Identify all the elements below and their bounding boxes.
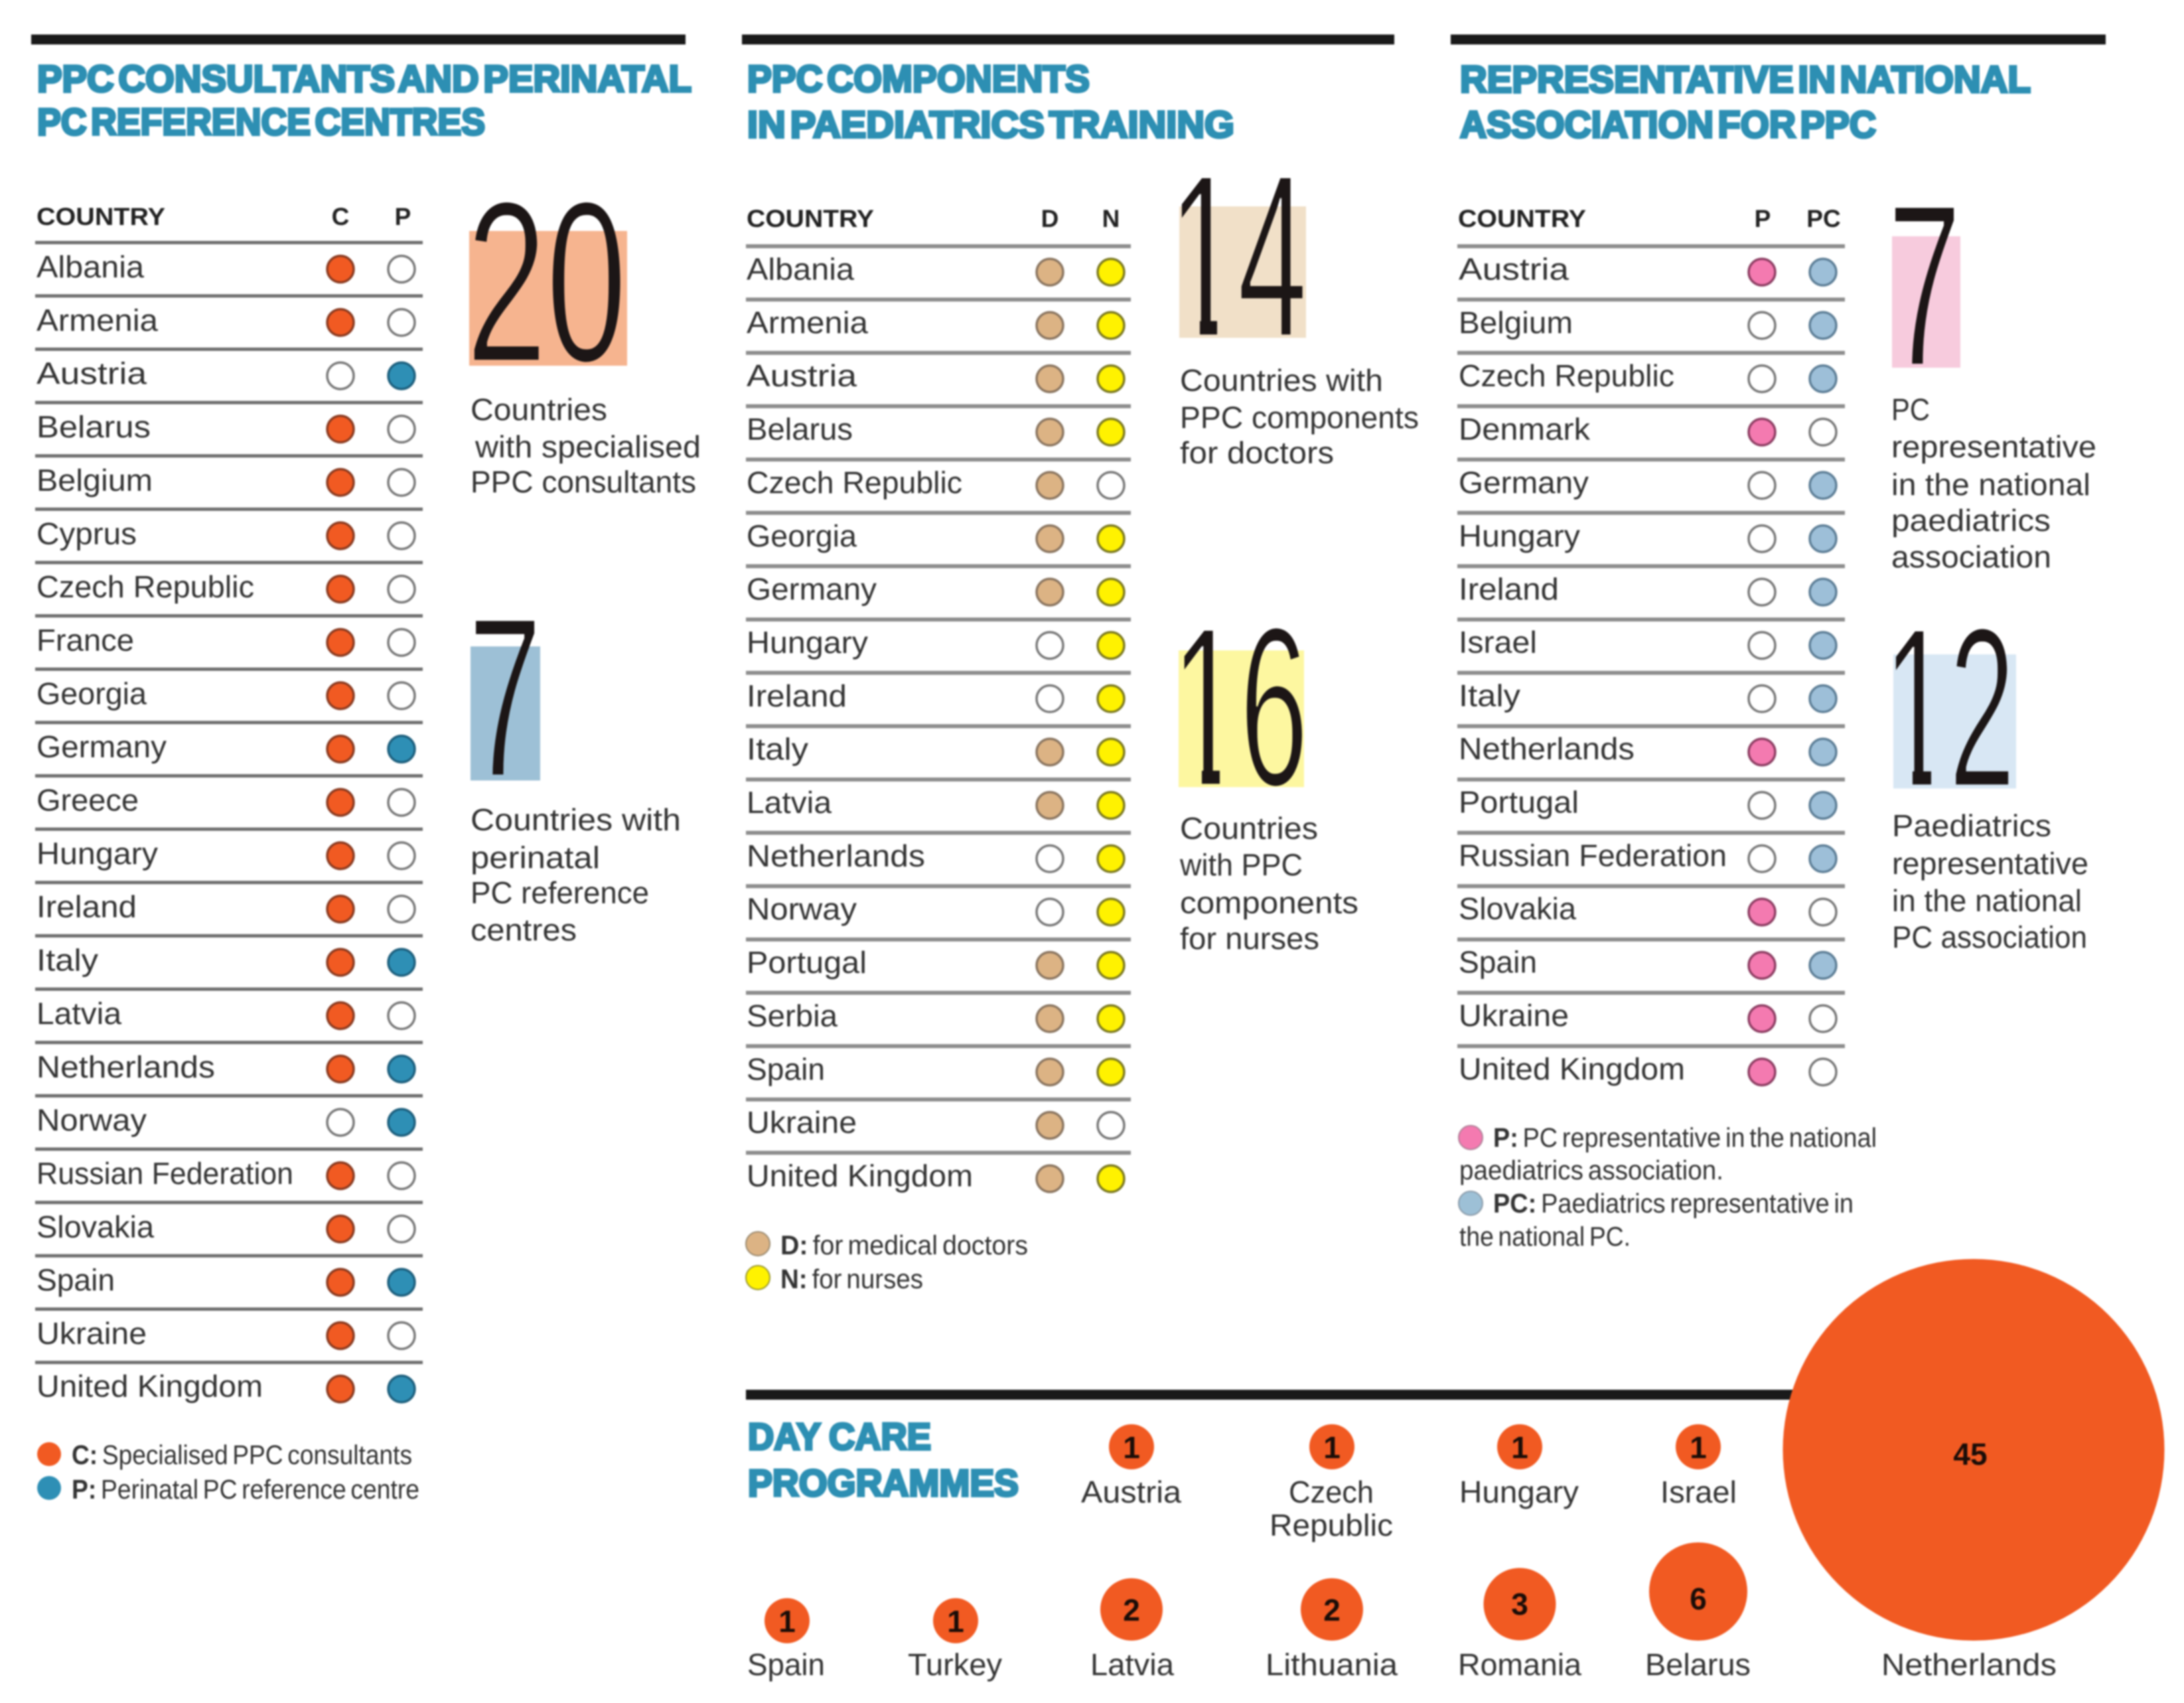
table header: country, P, PC: PC — [1806, 205, 1841, 232]
bubble: Hungary 1 — [1459, 1424, 1579, 1509]
bubble: Turkey 1 — [908, 1598, 1002, 1682]
table: consultants by country — [35, 241, 423, 1403]
row: Spain: Spain — [747, 1052, 825, 1086]
table header: country, C, P — [36, 203, 411, 230]
row: Cyprus — [35, 508, 423, 551]
bubble: Latvia 2: Latvia — [1090, 1647, 1174, 1682]
row: Hungary — [746, 617, 1131, 660]
row: Ukraine: Ukraine — [36, 1316, 147, 1351]
row: Albania: Albania — [36, 250, 144, 284]
row: Armenia — [746, 297, 1131, 340]
row: Portugal: Portugal — [747, 945, 867, 980]
stat: 12 paediatrics representative in the national PC association: representative — [1892, 846, 2088, 881]
stat: 7 PC representative in the national paediatrics association — [1888, 156, 2096, 574]
table header: country, C, P: COUNTRY — [36, 203, 165, 230]
bubble: Belarus 6 — [1645, 1542, 1751, 1682]
row: Portugal — [1457, 778, 1845, 819]
heading: components panel — [747, 58, 1234, 146]
heading: day care programmes: DAY CARE — [748, 1416, 931, 1458]
bubble: Israel 1: Israel — [1660, 1475, 1737, 1509]
stat: 7 countries with perinatal PC reference centres: Countries with — [471, 802, 681, 837]
row: United Kingdom — [1457, 1044, 1845, 1086]
row: Austria — [746, 351, 1131, 393]
bubble: Romania 3: 3 — [1511, 1587, 1528, 1621]
row: Russian Federation: Russian Federation — [36, 1156, 293, 1191]
row: Netherlands — [746, 831, 1131, 873]
row: Ireland: Ireland — [747, 678, 847, 713]
bubble: Israel 1 — [1660, 1424, 1737, 1509]
row: Hungary: Hungary — [36, 836, 158, 871]
bubble: Hungary 1: Hungary — [1459, 1475, 1579, 1509]
row: Ukraine: Ukraine — [1459, 998, 1569, 1033]
row: Ireland: Ireland — [36, 889, 137, 924]
bubble: Netherlands 45: Netherlands — [1881, 1647, 2057, 1682]
row: Ireland — [1457, 564, 1845, 607]
stat: 12 paediatrics representative in the national PC association: Paediatrics — [1892, 808, 2051, 843]
row: Cyprus: Cyprus — [36, 516, 137, 551]
row: Russian Federation: Russian Federation — [1459, 838, 1727, 873]
row: Czech Republic — [35, 561, 423, 604]
stat: 14 countries with PPC components for doctors: 14 — [1169, 126, 1307, 386]
row: Serbia — [746, 991, 1131, 1033]
bubble: Turkey 1: Turkey — [908, 1647, 1002, 1682]
row: Greece: Greece — [36, 783, 139, 818]
row: Albania: Albania — [747, 252, 854, 287]
row: Netherlands — [1457, 724, 1845, 766]
bubble: Austria 1: 1 — [1123, 1430, 1140, 1465]
row: Ukraine — [35, 1307, 423, 1351]
heading: representative panel: ASSOCIATION FOR PPC — [1460, 104, 1876, 146]
stat: 12 paediatrics representative in the national PC association — [1884, 580, 2088, 954]
row: Italy — [746, 724, 1131, 767]
heading: consultants panel: PPC CONSULTANTS AND PERINATAL — [37, 58, 692, 100]
stat: 20 countries with specialised PPC consultants: 20 — [467, 153, 626, 411]
bubble: Spain 1: Spain — [747, 1647, 825, 1682]
bubble: Lithuania 2 — [1266, 1578, 1398, 1682]
stat: 16 countries with PPC components for nurses: for nurses — [1180, 921, 1319, 956]
row: Hungary — [1457, 511, 1845, 553]
bubble: Lithuania 2: Lithuania — [1266, 1647, 1398, 1682]
row: Czech Republic: Czech Republic — [1459, 358, 1674, 393]
row: France — [35, 614, 423, 657]
bubble: Netherlands 45 — [1783, 1259, 2165, 1682]
row: Denmark — [1457, 404, 1845, 447]
row: Czech Republic — [1457, 351, 1845, 393]
panel: day care programmes — [746, 1259, 2165, 1682]
row: Slovakia: Slovakia — [1459, 891, 1576, 926]
row: Latvia: Latvia — [36, 996, 121, 1031]
row: Spain — [1457, 938, 1845, 980]
bubble: Austria 1: Austria — [1081, 1475, 1181, 1509]
row: Spain — [35, 1254, 423, 1297]
bubble: Czech Republic 1: 1 — [1323, 1430, 1341, 1465]
stat: 14 countries with PPC components for doctors: for doctors — [1180, 435, 1334, 470]
table header: country, P, PC: P — [1755, 205, 1771, 232]
bubble: Romania 3 — [1458, 1568, 1581, 1682]
stat: 7 PC representative in the national paediatrics association: PC — [1891, 392, 1930, 427]
row: Austria — [1457, 244, 1845, 287]
stat: 7 PC representative in the national paediatrics association: association — [1891, 540, 2051, 574]
bubble: Belarus 6: Belarus — [1645, 1647, 1751, 1682]
stat: 16 countries with PPC components for nurses: with PPC — [1179, 848, 1303, 882]
row: Latvia: Latvia — [747, 785, 832, 820]
stat: 16 countries with PPC components for nurses: 16 — [1172, 579, 1308, 834]
row: Belgium: Belgium — [1459, 305, 1573, 340]
row: United Kingdom — [35, 1361, 423, 1403]
table header: country, C, P: C — [332, 203, 349, 230]
bubble: Austria 1 — [1081, 1424, 1181, 1509]
row: United Kingdom: United Kingdom — [747, 1158, 973, 1193]
row: Georgia — [35, 668, 423, 711]
row: Netherlands: Netherlands — [1459, 731, 1635, 766]
legend: D and N: D: for medical doctors — [780, 1230, 1028, 1260]
bubble: Czech Republic 1 — [1270, 1424, 1393, 1542]
row: Ireland: Ireland — [1459, 572, 1559, 607]
row: Portugal: Portugal — [1459, 784, 1579, 819]
bubble: Hungary 1: 1 — [1511, 1430, 1528, 1465]
row: Belgium — [1457, 297, 1845, 340]
row: Italy: Italy — [747, 732, 808, 767]
legend: P and PC: PC: Paediatrics representative in — [1493, 1188, 1854, 1219]
panel: PPC components in paediatrics training — [742, 35, 1419, 1294]
bubble: Spain 1 — [747, 1598, 825, 1682]
heading: consultants panel: PC REFERENCE CENTRES — [37, 101, 485, 143]
row: Belgium — [35, 454, 423, 497]
row: Slovakia — [35, 1201, 423, 1244]
row: Norway: Norway — [36, 1103, 147, 1138]
row: United Kingdom: United Kingdom — [1459, 1051, 1685, 1086]
bubble: Lithuania 2: 2 — [1323, 1593, 1341, 1627]
row: Italy — [1457, 671, 1845, 713]
heading: components panel: PPC COMPONENTS — [747, 58, 1090, 100]
table: training components by country — [746, 244, 1131, 1193]
table header: country, C, P: P — [395, 203, 411, 230]
bubble: Turkey 1: 1 — [947, 1604, 964, 1639]
row: Spain: Spain — [36, 1263, 115, 1297]
bubble: Czech Republic 1: Czech — [1289, 1475, 1374, 1509]
row: Ireland — [746, 671, 1131, 713]
table header: country, D, N — [747, 205, 1120, 232]
row: Denmark: Denmark — [1459, 412, 1591, 447]
row: Ukraine — [1457, 991, 1845, 1033]
bubble: Belarus 6: 6 — [1690, 1582, 1707, 1616]
table header: country, P, PC — [1458, 205, 1841, 232]
row: Germany — [35, 721, 423, 764]
row: Georgia: Georgia — [747, 518, 857, 553]
row: Albania — [35, 241, 423, 284]
heading: representative panel — [1460, 58, 2031, 146]
row: Czech Republic: Czech Republic — [747, 465, 962, 500]
heading: representative panel: REPRESENTATIVE IN NATIONAL — [1460, 58, 2031, 101]
row: Israel — [1457, 617, 1845, 659]
row: Hungary: Hungary — [1459, 518, 1580, 553]
table: representatives by country — [1457, 244, 1845, 1086]
row: Armenia: Armenia — [36, 303, 158, 337]
stat: 7 countries with perinatal PC reference centres: centres — [471, 913, 577, 947]
heading: consultants panel — [37, 58, 692, 143]
stat: 7 countries with perinatal PC reference centres: 7 — [469, 570, 542, 826]
row: Slovakia — [1457, 884, 1845, 926]
row: United Kingdom: United Kingdom — [36, 1369, 263, 1403]
row: Germany — [746, 564, 1131, 607]
row: Germany: Germany — [36, 729, 167, 764]
row: Serbia: Serbia — [747, 998, 837, 1033]
bubble: Netherlands 45: 45 — [1953, 1437, 1988, 1471]
bubble: Israel 1: 1 — [1690, 1430, 1707, 1465]
row: Germany: Germany — [1459, 465, 1589, 500]
stat: 7 countries with perinatal PC reference centres — [469, 570, 681, 947]
legend: P and PC — [1459, 1122, 1877, 1252]
stat: 7 PC representative in the national paediatrics association: representative — [1891, 429, 2096, 464]
bubble: Spain 1: 1 — [778, 1604, 796, 1639]
bubble: Czech Republic 1: Republic — [1270, 1508, 1393, 1542]
row: Austria: Austria — [1459, 252, 1569, 287]
stat: 7 PC representative in the national paediatrics association: in the national — [1891, 467, 2090, 502]
row: Belgium: Belgium — [36, 463, 153, 497]
row: Netherlands: Netherlands — [747, 838, 925, 873]
stat: 20 countries with specialised PPC consultants — [467, 153, 701, 499]
stat: 20 countries with specialised PPC consultants: Countries — [471, 392, 607, 427]
row: Ukraine: Ukraine — [747, 1105, 857, 1140]
row: Hungary — [35, 828, 423, 871]
legend: D and N — [746, 1230, 1028, 1294]
legend: C and P — [37, 1440, 419, 1505]
table header: country, D, N: N — [1102, 205, 1120, 232]
legend: P and PC: P: PC representative in the national — [1493, 1122, 1877, 1153]
stat: 16 countries with PPC components for nurses: Countries — [1180, 811, 1318, 846]
stat: 7 countries with perinatal PC reference centres: PC reference — [471, 875, 649, 910]
row: Germany — [1457, 457, 1845, 500]
stat: 7 countries with perinatal PC reference centres: perinatal — [471, 840, 600, 875]
table header: country, D, N: D — [1041, 205, 1058, 232]
row: Israel: Israel — [1459, 625, 1537, 659]
row: Belarus: Belarus — [747, 412, 853, 447]
row: Austria — [35, 348, 423, 391]
row: Austria: Austria — [36, 356, 147, 391]
stat: 7 PC representative in the national paediatrics association: paediatrics — [1891, 503, 2051, 538]
row: Italy: Italy — [36, 943, 98, 978]
row: Ireland — [35, 881, 423, 924]
legend: C and P: C: Specialised PPC consultants — [72, 1440, 412, 1470]
row: Norway: Norway — [747, 892, 857, 926]
row: Belarus — [35, 401, 423, 444]
row: Netherlands: Netherlands — [36, 1049, 215, 1084]
stat: 16 countries with PPC components for nurses — [1172, 579, 1358, 956]
row: Netherlands — [35, 1041, 423, 1084]
row: Norway — [35, 1094, 423, 1138]
stat: 12 paediatrics representative in the national PC association: PC association — [1892, 920, 2087, 954]
row: Ukraine — [746, 1098, 1131, 1140]
row: France: France — [36, 623, 134, 657]
row: Latvia — [35, 988, 423, 1031]
heading: day care programmes: PROGRAMMES — [748, 1462, 1019, 1505]
stat: 14 countries with PPC components for doctors: Countries with — [1180, 363, 1383, 398]
row: United Kingdom — [746, 1151, 1131, 1193]
row: Greece — [35, 774, 423, 818]
row: Slovakia: Slovakia — [36, 1209, 154, 1244]
row: Belarus: Belarus — [36, 409, 151, 444]
row: Georgia — [746, 511, 1131, 553]
stat: 20 countries with specialised PPC consultants: with specialised — [474, 429, 701, 464]
heading: day care programmes — [748, 1416, 1019, 1505]
legend: P and PC: the national PC. — [1459, 1221, 1631, 1252]
row: Austria: Austria — [747, 358, 857, 393]
row: Germany: Germany — [747, 572, 877, 607]
row: Latvia — [746, 778, 1131, 820]
row: Armenia: Armenia — [747, 305, 868, 340]
bubble: Latvia 2 — [1090, 1578, 1174, 1682]
panel: PPC consultants and perinatal PC reference centres — [31, 35, 701, 1505]
row: Albania — [746, 244, 1131, 287]
row: Georgia: Georgia — [36, 676, 147, 711]
row: Hungary: Hungary — [747, 625, 868, 660]
stat: 16 countries with PPC components for nurses: components — [1180, 885, 1358, 920]
panel: representative in national association for PPC — [1451, 35, 2106, 1252]
heading: components panel: IN PAEDIATRICS TRAINING — [747, 104, 1234, 146]
row: Spain: Spain — [1459, 945, 1537, 980]
legend: C and P: P: Perinatal PC reference centre — [72, 1474, 419, 1505]
row: Norway — [746, 884, 1131, 926]
row: Russian Federation — [1457, 831, 1845, 873]
row: Russian Federation — [35, 1148, 423, 1191]
stat: 7 PC representative in the national paediatrics association: 7 — [1888, 156, 1961, 415]
table header: country, P, PC: COUNTRY — [1458, 205, 1586, 232]
stat: 20 countries with specialised PPC consultants: PPC consultants — [471, 465, 696, 499]
row: Belarus — [746, 404, 1131, 447]
row: Czech Republic — [746, 457, 1131, 500]
legend: P and PC: paediatrics association. — [1459, 1155, 1723, 1185]
legend: D and N: N: for nurses — [780, 1264, 923, 1294]
row: Spain — [746, 1044, 1131, 1086]
stat: 12 paediatrics representative in the national PC association: in the national — [1892, 883, 2082, 918]
row: Czech Republic: Czech Republic — [36, 569, 254, 604]
stat: 12 paediatrics representative in the national PC association: 12 — [1884, 580, 2015, 835]
table header: country, D, N: COUNTRY — [747, 205, 874, 232]
row: Portugal — [746, 938, 1131, 980]
row: Italy — [35, 934, 423, 978]
bubble: Latvia 2: 2 — [1123, 1593, 1140, 1627]
bubble: Romania 3: Romania — [1458, 1647, 1581, 1682]
row: Armenia — [35, 294, 423, 337]
row: Italy: Italy — [1459, 678, 1520, 713]
stat: 14 countries with PPC components for doctors: PPC components — [1180, 400, 1419, 435]
